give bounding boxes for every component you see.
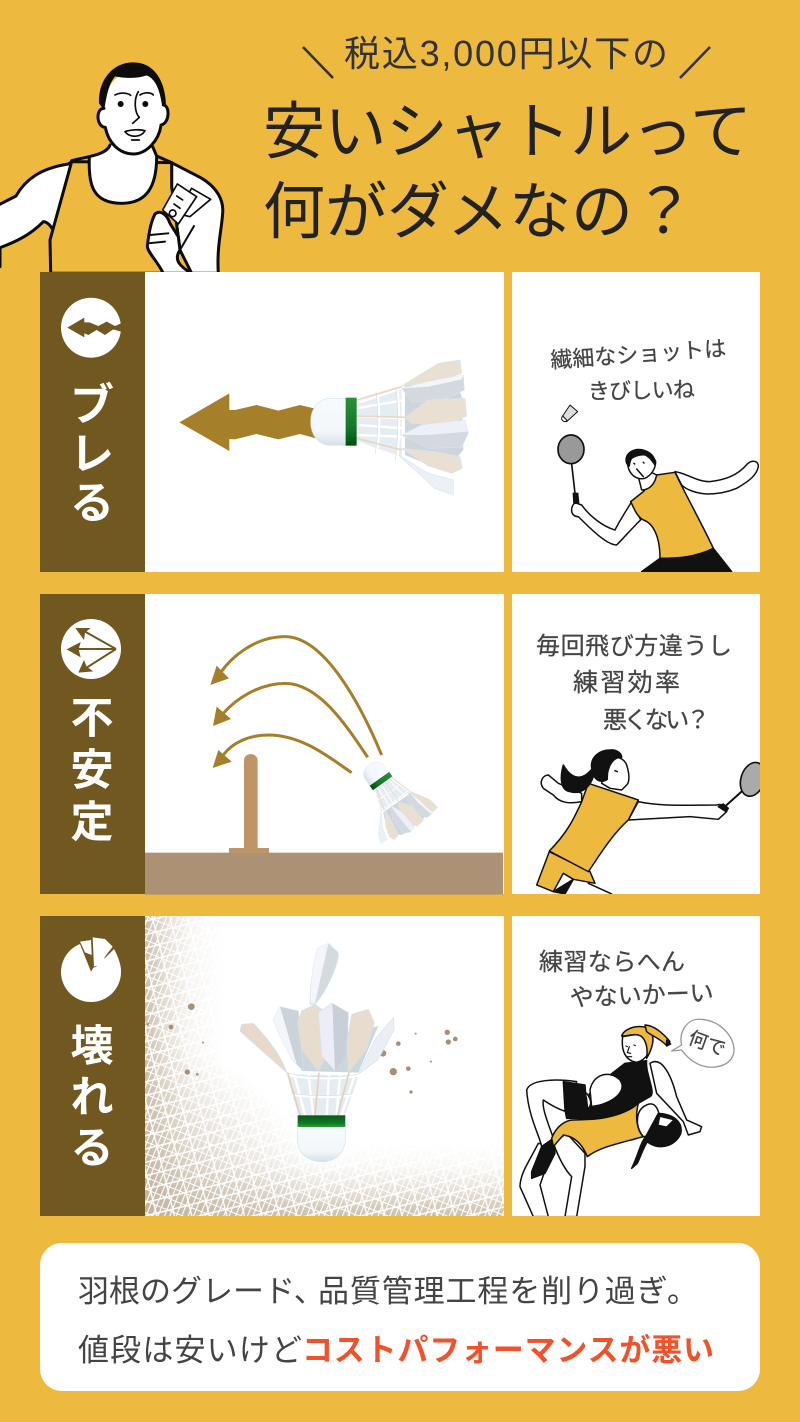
panel: unstable comic: [512, 594, 769, 894]
conclusion line 1: [78, 1274, 698, 1309]
handwritten comment: [536, 626, 732, 735]
conclusion line 2: 値段は安いけど: [78, 1333, 302, 1368]
label text: 安: [70, 747, 114, 795]
main title: [263, 98, 752, 247]
arrow: zigzag: [179, 393, 318, 451]
handwritten comment: [539, 942, 714, 1013]
texture: scratched corners: [145, 916, 504, 1216]
panel: 不安定 label: [40, 594, 145, 894]
panel: broken comic: [512, 916, 760, 1217]
flying feather: [310, 943, 338, 1004]
label text: れ: [70, 1074, 114, 1122]
shuttlecock: [311, 360, 468, 495]
illustration: player reaching: [537, 750, 769, 894]
icon: broken circle: [61, 937, 121, 1002]
label text: [70, 381, 114, 528]
panel: ブレる label: [40, 272, 145, 572]
label text: る: [70, 479, 114, 528]
handwritten comment: 毎回飛び方違うし: [536, 626, 732, 661]
icon: wobbling arrow: [61, 298, 121, 358]
label text: レ: [70, 430, 114, 479]
conclusion line 1: 羽根のグレード、: [78, 1274, 325, 1309]
handwritten comment: 練習ならへん: [539, 942, 685, 977]
shuttlecock: [339, 747, 440, 850]
label text: る: [70, 1125, 114, 1173]
handwritten comment: 繊細なショットは: [549, 331, 727, 375]
handwritten comment: [549, 331, 727, 406]
shuttlecock: [240, 1003, 394, 1162]
debris dots: [146, 1003, 458, 1094]
label text: [70, 695, 114, 847]
panel: unstable trajectories: [145, 594, 504, 895]
handwritten comment: きびしいね: [588, 372, 695, 406]
conclusion line 1: 品質管理工程を削り過ぎ。: [318, 1274, 698, 1309]
panel: wobble comic: [512, 272, 760, 572]
net post: [229, 754, 269, 853]
handwritten comment: やないかーい: [569, 973, 714, 1013]
icon: diverging arrows: [61, 619, 121, 679]
conclusion box: [40, 1243, 760, 1391]
highlighted phrase: コストパフォーマンスが悪い: [302, 1333, 714, 1368]
panel: wobble shuttle: [145, 272, 504, 572]
panel: broken shuttle: [145, 916, 504, 1216]
main title: 何がダメなの？: [263, 178, 695, 247]
title lead-in with slashes: 税込3,000円以下の: [344, 33, 668, 74]
label text: 壊: [70, 1023, 114, 1071]
illustration: wrestlers: [520, 1025, 702, 1217]
label text: 不: [70, 695, 114, 743]
illustration: man holding cash: [0, 63, 223, 273]
main title: 安いシャトルって: [263, 98, 752, 167]
label text: 定: [70, 799, 114, 847]
ground: [145, 853, 503, 895]
panel: 壊れる label: [40, 916, 145, 1216]
handwritten comment: 練習効率: [573, 663, 680, 699]
label text: ブ: [70, 381, 114, 430]
speech bubble: 何で: [685, 1023, 730, 1062]
label text: [70, 1023, 114, 1173]
speech bubble: [672, 1019, 734, 1067]
arrows: trajectories: [220, 637, 382, 773]
handwritten comment: 悪くない？: [603, 700, 710, 735]
illustration: player with racket: [558, 405, 758, 572]
